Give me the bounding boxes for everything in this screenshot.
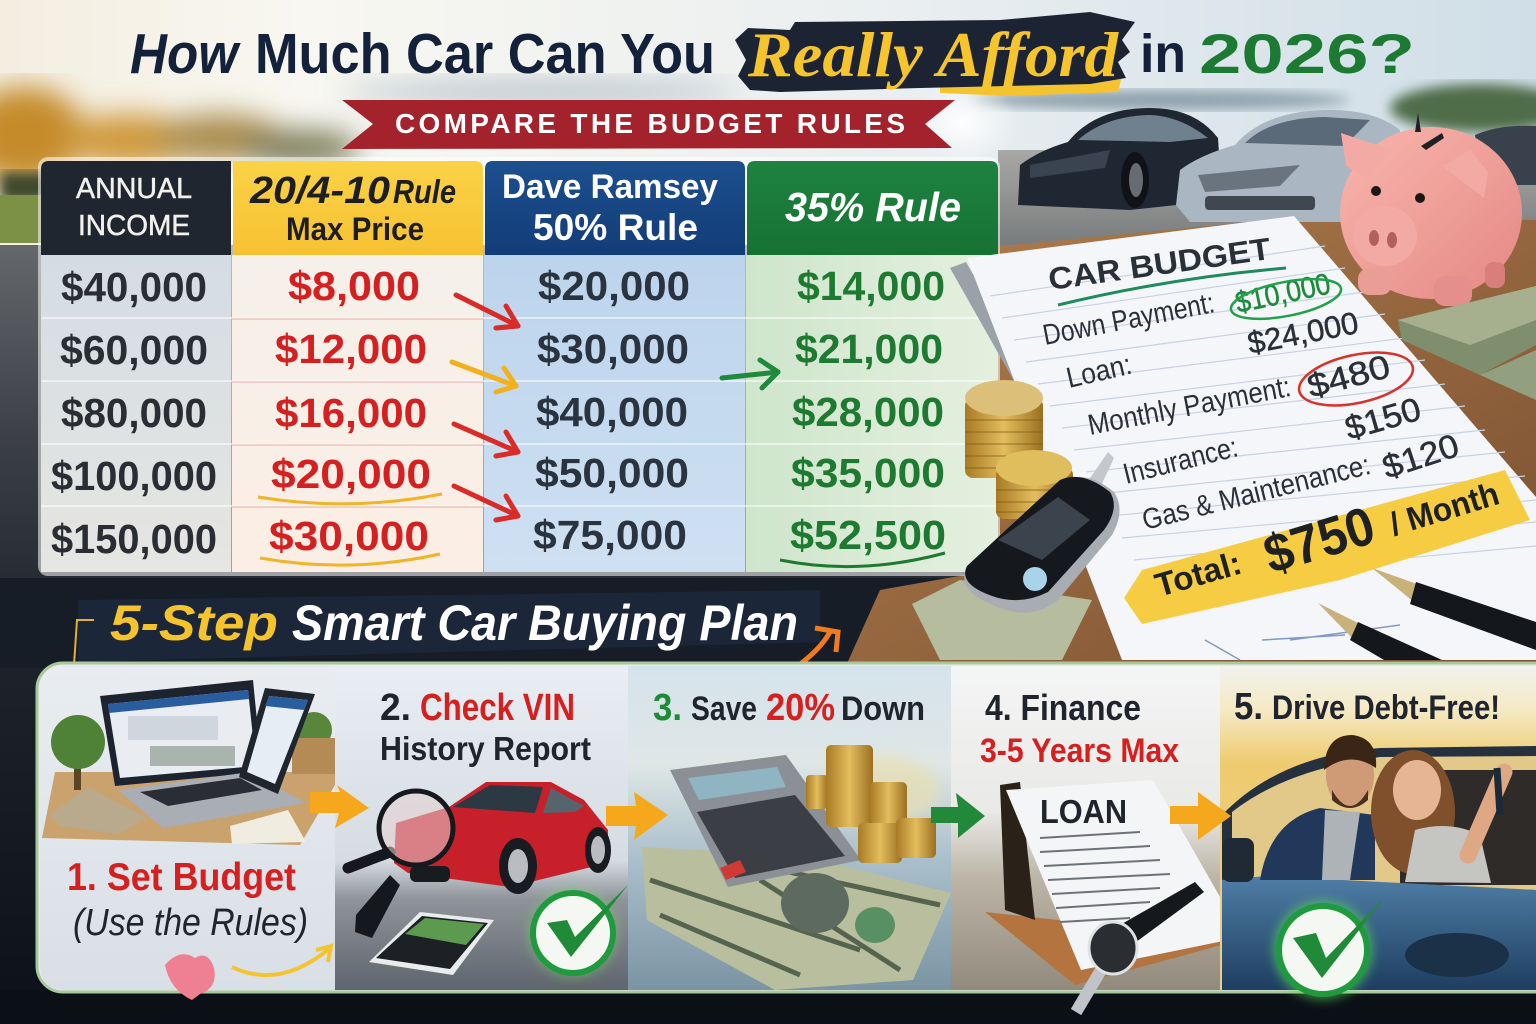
Dave Ramsey values: $20,000 xyxy=(538,263,690,309)
budget lines: $10,000 xyxy=(1233,268,1333,320)
step 3: save 20% down: 20% xyxy=(766,687,835,729)
icon: cash stack right xyxy=(1398,286,1536,400)
step 5: drive debt-free xyxy=(1220,666,1536,1000)
calculator xyxy=(670,755,861,887)
step 4: finance: 4. Finance xyxy=(985,687,1141,728)
budget paper: / Month xyxy=(1385,475,1503,543)
step 4: finance xyxy=(951,666,1243,1012)
step arrows xyxy=(310,785,1231,840)
budget paper xyxy=(950,216,1536,660)
title: How xyxy=(130,22,241,86)
step 1: set budget: (Use the Rules) xyxy=(73,902,308,944)
step 2: VIN report xyxy=(335,666,628,990)
man xyxy=(1260,735,1376,880)
car door xyxy=(1222,876,1536,990)
step 4: finance: 3-5 Years Max xyxy=(980,732,1179,770)
budget lines: $120 xyxy=(1378,426,1463,486)
phone/tablet xyxy=(239,688,315,794)
header: 35% rule: 35% Rule xyxy=(785,184,961,230)
icon: pens xyxy=(1318,568,1536,660)
cash pile xyxy=(642,847,951,990)
budget paper: $750 xyxy=(1257,495,1382,585)
header: annual income: ANNUAL xyxy=(76,173,192,205)
header: 35% rule xyxy=(747,161,998,255)
header: 20/4-10 rule: 20/4-10 xyxy=(249,170,390,212)
budget lines: $150 xyxy=(1341,390,1425,447)
dark car xyxy=(1018,108,1222,210)
step 1: set budget: 1. Set Budget xyxy=(67,856,296,899)
35% values: $28,000 xyxy=(792,389,944,435)
red car xyxy=(394,782,611,894)
Dave Ramsey values: $50,000 xyxy=(535,450,689,496)
budget lines: Down Payment: xyxy=(1040,287,1217,352)
header: 20/4-10 rule: Rule xyxy=(393,173,456,210)
magnifier xyxy=(348,791,453,868)
silver car xyxy=(1176,110,1400,222)
header: Dave Ramsey: 50% Rule xyxy=(533,207,698,248)
header: Dave Ramsey: Dave Ramsey xyxy=(502,168,718,206)
income values: $80,000 xyxy=(61,390,207,436)
paper heading: CAR BUDGET xyxy=(1046,231,1273,297)
step 3: save 20% down: 3. xyxy=(653,687,682,729)
step 5: drive debt-free: 5. xyxy=(1234,686,1263,728)
steps panel xyxy=(37,663,1536,1012)
20/4-10 values: $12,000 xyxy=(275,326,427,372)
side mirror xyxy=(1222,838,1254,882)
step 5: drive debt-free: Drive Debt-Free! xyxy=(1272,689,1500,727)
icon: gold coins xyxy=(965,380,1073,519)
step 3: save 20% down xyxy=(628,666,951,990)
title brush highlight xyxy=(735,12,1135,96)
couple xyxy=(1260,735,1504,883)
checkmark badge xyxy=(1273,898,1384,1000)
step 3: save 20% down: Down xyxy=(841,690,925,728)
budget lines: Gas & Maintenance: xyxy=(1139,449,1374,537)
key fob xyxy=(355,875,400,938)
parked cars xyxy=(1018,108,1536,222)
step 1: set budget xyxy=(40,666,335,1000)
income values xyxy=(51,264,217,562)
35% values: $14,000 xyxy=(797,263,945,309)
ribbon subtitle: COMPARE THE BUDGET RULES xyxy=(395,108,905,139)
budget lines: Loan: xyxy=(1063,349,1135,395)
arrows between columns xyxy=(452,295,778,520)
woman xyxy=(1371,750,1504,883)
budget lines: Insurance: xyxy=(1120,431,1241,491)
icon: cash under key xyxy=(912,580,1092,660)
step 2: VIN report: 2. xyxy=(380,687,411,729)
stacked papers xyxy=(49,787,147,834)
Dave Ramsey values: $40,000 xyxy=(536,389,688,435)
small curved arrow xyxy=(232,946,331,975)
20/4-10 values xyxy=(258,263,442,565)
budget lines: $24,000 xyxy=(1245,305,1361,361)
35% values: $21,000 xyxy=(795,326,943,372)
20/4-10 values: $16,000 xyxy=(275,390,427,436)
icon: piggy bank xyxy=(1340,113,1522,306)
coins xyxy=(806,745,936,863)
ribbon subtitle xyxy=(342,100,955,149)
header: Dave Ramsey xyxy=(485,161,745,255)
35% values: $52,500 xyxy=(790,512,946,558)
35% values xyxy=(780,263,946,567)
35% values: $35,000 xyxy=(791,450,945,496)
budget paper: Total: xyxy=(1151,544,1246,604)
icon: car key fob xyxy=(964,452,1120,613)
plant xyxy=(51,715,105,790)
total highlight xyxy=(1124,470,1530,624)
tablet xyxy=(369,912,494,975)
header: annual income: INCOME xyxy=(78,210,190,242)
wooden table surface xyxy=(845,218,1536,668)
header: annual income xyxy=(41,161,231,255)
door handle xyxy=(1405,933,1509,977)
header: 20/4-10 rule: Max Price xyxy=(286,211,424,247)
20/4-10 values: $20,000 xyxy=(271,451,431,497)
small pig icon xyxy=(165,954,215,1000)
income values: $60,000 xyxy=(60,327,208,373)
budget lines: Monthly Payment: xyxy=(1085,371,1294,442)
basket plant xyxy=(292,712,335,774)
income values: $150,000 xyxy=(51,516,217,562)
step 2: VIN report: Check VIN xyxy=(420,687,575,729)
title: Really Afford xyxy=(747,19,1119,90)
title: Much Car Can You xyxy=(255,22,715,86)
checkmark badge xyxy=(527,885,628,979)
section heading: Smart Car Buying Plan xyxy=(292,595,798,651)
step 2: VIN report: History Report xyxy=(380,730,591,767)
loan paper xyxy=(1006,780,1243,970)
title: 2026? xyxy=(1199,22,1415,85)
income values: $100,000 xyxy=(51,453,217,499)
20/4-10 values: $30,000 xyxy=(269,513,429,559)
distant trees right xyxy=(1390,84,1536,132)
laptop xyxy=(100,680,306,828)
Dave Ramsey values xyxy=(533,263,690,558)
section heading xyxy=(73,590,838,680)
loan paper: LOAN xyxy=(1040,793,1127,830)
title: in xyxy=(1140,24,1186,84)
budget lines xyxy=(1040,268,1463,537)
section heading: 5-Step xyxy=(110,595,278,651)
header: 20/4-10 rule xyxy=(233,161,483,255)
car roof and window xyxy=(1222,746,1536,895)
blueprint sheet xyxy=(230,810,306,844)
title xyxy=(130,12,1415,96)
Dave Ramsey values: $30,000 xyxy=(537,326,689,372)
step 3: save 20% down: Save xyxy=(691,690,757,728)
far car xyxy=(1475,126,1536,185)
column backgrounds xyxy=(41,255,998,572)
dark binder xyxy=(1000,782,1035,920)
budget lines: $480 xyxy=(1303,347,1394,405)
wooden clipboard base xyxy=(985,912,1240,985)
20/4-10 values: $8,000 xyxy=(288,263,420,309)
comparison table xyxy=(38,157,1000,576)
Dave Ramsey values: $75,000 xyxy=(533,512,687,558)
pen and key xyxy=(1076,882,1204,1012)
income values: $40,000 xyxy=(61,264,207,310)
